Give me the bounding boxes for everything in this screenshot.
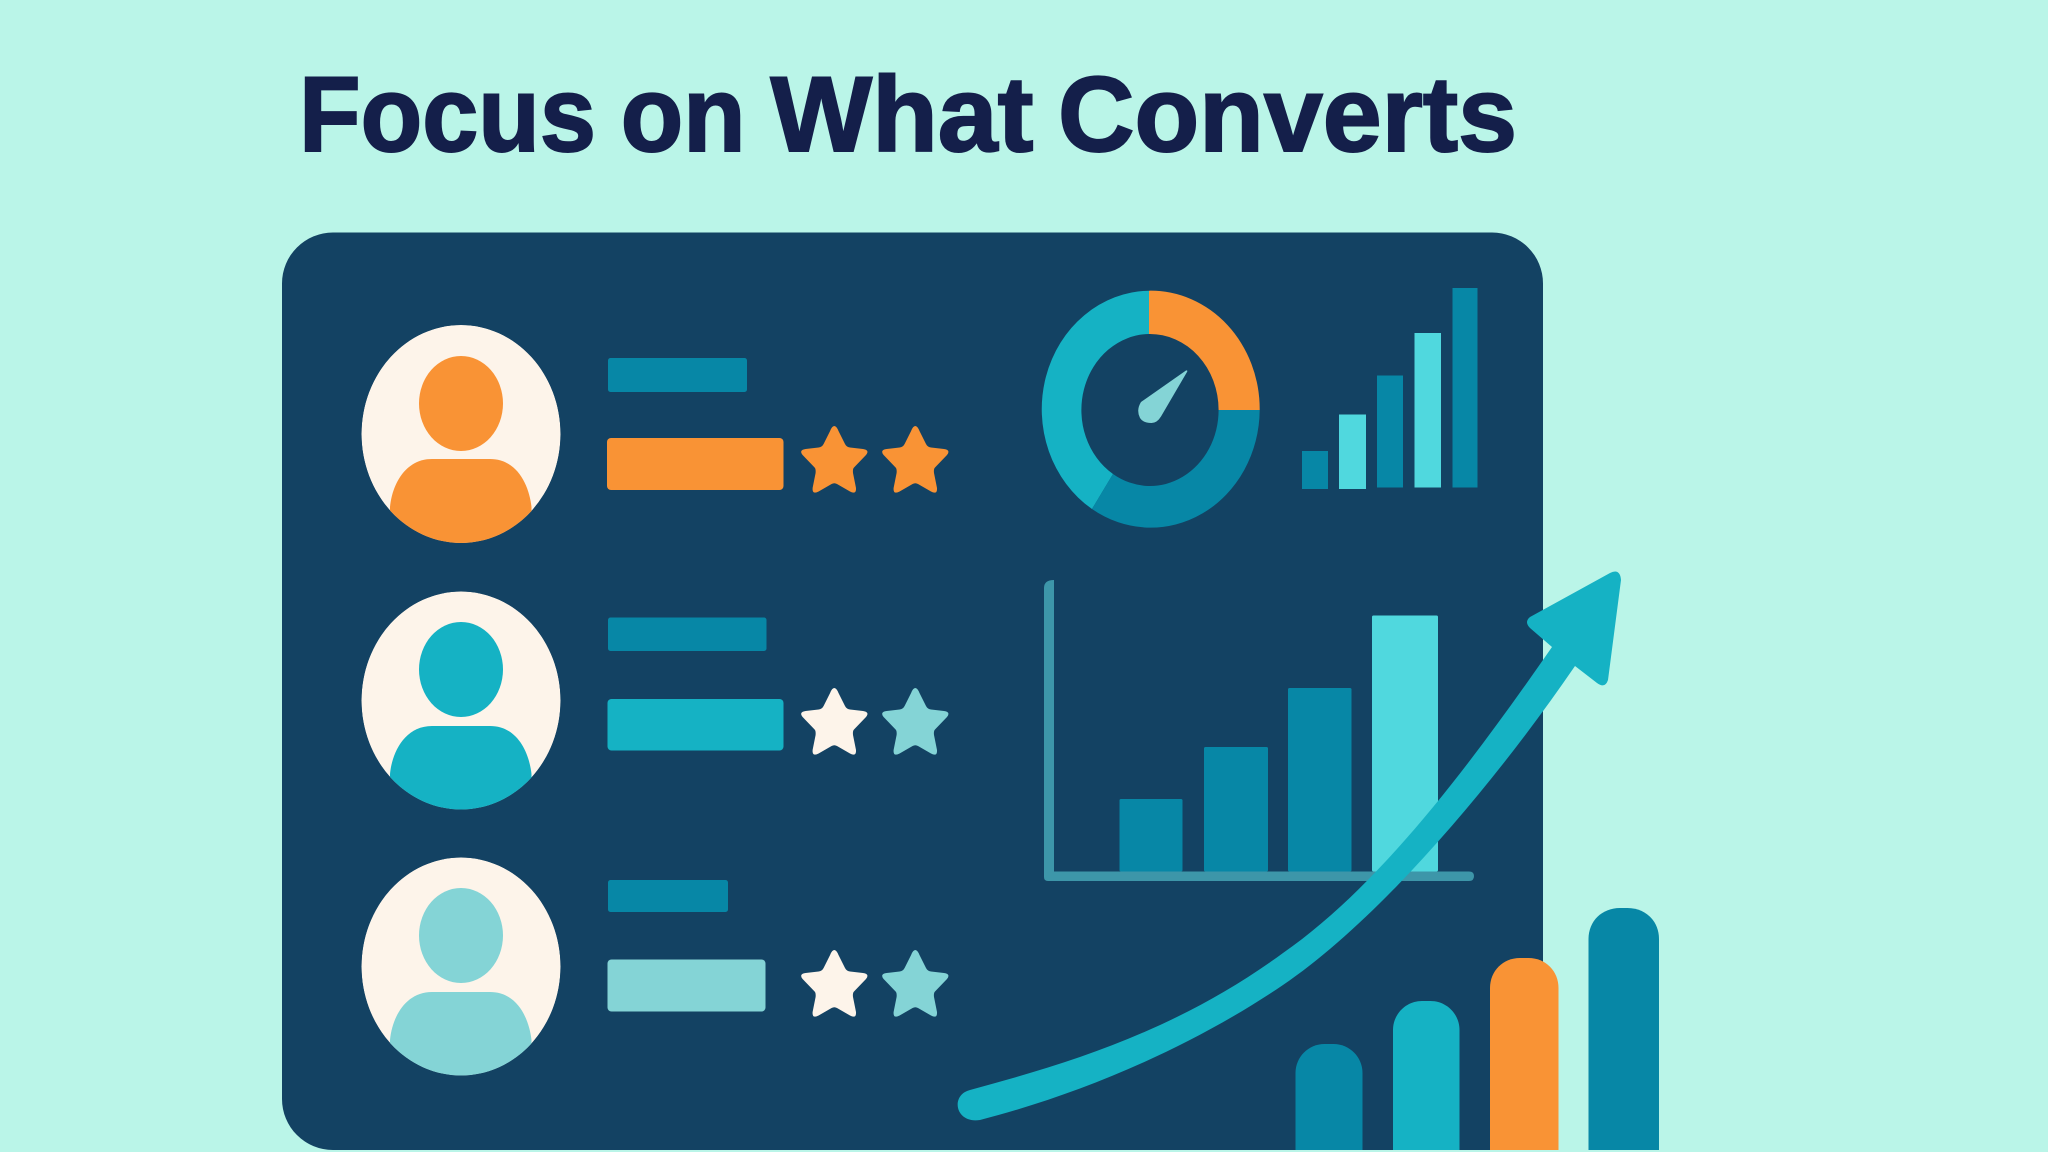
label bar [608, 880, 728, 912]
gauge: donut with needle [1042, 291, 1260, 528]
stars [801, 950, 948, 1017]
value bar [608, 699, 784, 750]
donut: orange segment [1149, 291, 1260, 410]
chart axes [1044, 580, 1474, 881]
donut: dark teal segment [1092, 410, 1260, 528]
title: Focus [299, 54, 596, 174]
needle [1138, 370, 1187, 423]
title: Converts [1058, 54, 1517, 174]
profile row 3: pale teal [362, 858, 948, 1093]
profile row 2: teal [362, 592, 948, 827]
avatar: teal person [362, 592, 560, 827]
label bar [608, 358, 747, 392]
avatar: pale teal person [362, 858, 560, 1093]
value bar [608, 960, 766, 1012]
label bar [608, 618, 766, 651]
small bar chart [1302, 288, 1478, 489]
stars [801, 688, 948, 755]
value bar [607, 438, 784, 490]
avatar: orange person [362, 325, 560, 560]
profile row 1: orange [362, 325, 948, 560]
panel: dashboard background [282, 232, 1543, 1150]
main bar chart [1044, 580, 1474, 881]
title: What [770, 54, 1034, 174]
stars [801, 426, 948, 493]
chart bars [1120, 799, 1182, 872]
title: on [621, 54, 746, 174]
title [299, 54, 1517, 174]
growth arrow [958, 572, 1621, 1120]
bottom rounded bars [1296, 908, 1659, 1150]
donut: light teal segment [1042, 291, 1149, 509]
